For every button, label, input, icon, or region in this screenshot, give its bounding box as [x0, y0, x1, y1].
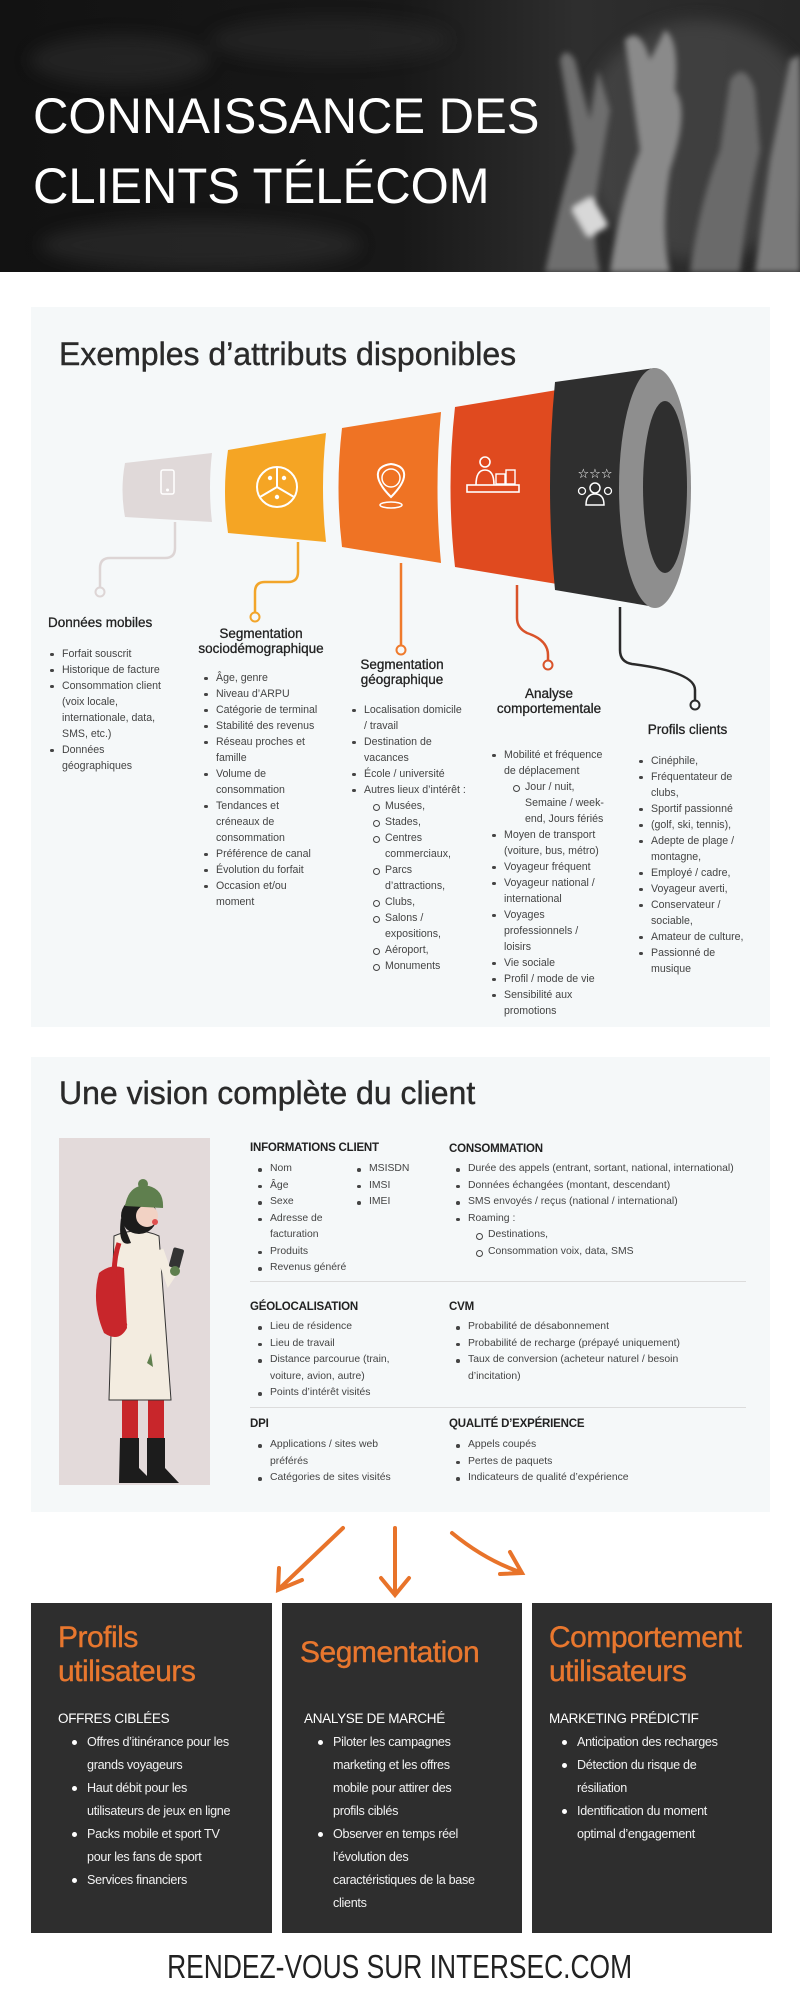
arrow: right — [452, 1533, 522, 1574]
column title: comportementale — [497, 701, 601, 716]
section list: Applications / sites web — [270, 1439, 378, 1450]
box list: Identification du moment — [577, 1804, 707, 1818]
section list: facturation — [270, 1229, 319, 1240]
section list: Sexe — [270, 1196, 294, 1207]
connector: red — [517, 585, 552, 670]
section list: Distance parcourue (train, — [270, 1354, 390, 1365]
section list: Points d’intérêt visités — [270, 1387, 370, 1398]
section list: Appels coupés — [468, 1439, 536, 1450]
background photo: raised hands — [35, 18, 800, 272]
column list: Passionné de — [651, 947, 715, 959]
section list 2: IMSI — [369, 1180, 390, 1190]
column list: Sensibilité aux — [504, 989, 572, 1001]
column list: Adepte de plage / — [651, 835, 734, 847]
funnel segment: yellow — [225, 433, 326, 542]
column list: famille — [216, 752, 247, 764]
heading: exemples d'attributs disponibles: Exemples d’attributs disponibles — [59, 336, 516, 372]
column list: (voix locale, — [62, 696, 118, 708]
column list: Salons / — [385, 912, 423, 924]
column list: professionnels / — [504, 925, 578, 937]
column list: Sportif passionné — [651, 803, 733, 815]
column list: Voyageur averti, — [651, 883, 728, 895]
box list: pour les fans de sport — [87, 1850, 202, 1864]
column list: Centres — [385, 832, 422, 844]
section list: Catégories de sites visités — [270, 1472, 391, 1483]
illustration: woman with phone — [59, 1138, 210, 1485]
box subheading: OFFRES CIBLÉES — [58, 1711, 169, 1726]
box subheading: MARKETING PRÉDICTIF — [549, 1711, 699, 1726]
section: dpi — [250, 1418, 391, 1483]
section list: Pertes de paquets — [468, 1456, 552, 1466]
section list — [456, 1163, 734, 1257]
connector: yellow — [250, 542, 298, 622]
section heading: CVM — [449, 1301, 474, 1313]
column list: Clubs, — [385, 896, 415, 908]
section list: Adresse de — [270, 1212, 323, 1224]
column list: expositions, — [385, 928, 441, 940]
header banner — [0, 0, 800, 272]
column title: Analyse — [525, 686, 573, 701]
column list: Jour / nuit, — [525, 781, 574, 793]
heading: une vision complète du client: Une vision complète du client — [59, 1075, 475, 1111]
section heading: DPI — [250, 1418, 269, 1430]
column: profils clients — [639, 722, 743, 975]
box title: utilisateurs — [58, 1655, 195, 1688]
panel: vision complète — [31, 1057, 770, 1512]
box list: Observer en temps réel — [333, 1827, 458, 1841]
connector: dark — [620, 607, 700, 710]
column list: Tendances et — [216, 800, 279, 812]
section list: Âge — [270, 1180, 288, 1190]
column list: sociable, — [651, 915, 693, 927]
section list: d’incitation) — [468, 1370, 521, 1382]
column title — [497, 686, 601, 716]
section list 2: MSISDN — [369, 1163, 409, 1174]
arrow: left — [278, 1528, 343, 1590]
column list: Destination de — [364, 736, 432, 748]
column list: géographiques — [62, 760, 132, 772]
title: CONNAISSANCE DES — [33, 88, 539, 144]
column list: Historique de facture — [62, 664, 160, 676]
funnel segment: dark cylinder: ☆☆☆ — [578, 467, 612, 482]
section list: voiture, avion, autre) — [270, 1370, 365, 1382]
box title — [549, 1621, 742, 1688]
column list: Localisation domicile — [364, 704, 462, 716]
column list: Monuments — [385, 960, 440, 972]
column list: Employé / cadre, — [651, 867, 730, 879]
column list: Données — [62, 744, 104, 756]
box list — [72, 1735, 230, 1887]
column list: Aéroport, — [385, 944, 429, 956]
section list: Probabilité de recharge (prépayé uniquement) — [468, 1338, 680, 1348]
column list: Voyages — [504, 909, 545, 921]
column title: Profils clients — [648, 722, 727, 737]
column title: sociodémographique — [198, 641, 324, 656]
funnel segment: dark cylinder — [550, 368, 691, 608]
column list: Profil / mode de vie — [504, 973, 595, 985]
box: segmentation — [282, 1603, 522, 1933]
column list: Parcs — [385, 864, 412, 876]
column list — [639, 755, 743, 975]
section list — [258, 1321, 390, 1398]
box: comportement utilisateurs — [532, 1603, 772, 1933]
column list: consommation — [216, 832, 285, 844]
title: CLIENTS TÉLÉCOM — [33, 158, 490, 214]
section list: Probabilité de désabonnement — [468, 1321, 609, 1332]
box list: Détection du risque de — [577, 1758, 696, 1772]
box list: Offres d’itinérance pour les — [87, 1735, 229, 1749]
section heading: QUALITÉ D’EXPÉRIENCE — [449, 1418, 584, 1430]
funnel segment: orange — [338, 412, 441, 563]
box list: caractéristiques de la base — [333, 1873, 475, 1887]
section: géolocalisation — [250, 1299, 390, 1398]
section list: Taux de conversion (acheteur naturel / besoin — [468, 1354, 678, 1365]
section list: Produits — [270, 1246, 308, 1256]
box list: Haut débit pour les — [87, 1781, 187, 1795]
column list: Amateur de culture, — [651, 931, 743, 943]
column list: créneaux de — [216, 816, 274, 828]
column title: Segmentation — [360, 657, 444, 672]
box list — [562, 1735, 718, 1841]
column list — [352, 704, 466, 972]
column list: / travail — [364, 720, 398, 732]
section list: Lieu de travail — [270, 1338, 335, 1348]
column list: Conservateur / — [651, 899, 720, 911]
box list: résiliation — [577, 1781, 627, 1795]
box list: optimal d’engagement — [577, 1827, 695, 1841]
section list: Destinations, — [488, 1229, 548, 1240]
column list: commerciaux, — [385, 848, 451, 860]
column list: musique — [651, 963, 691, 975]
column list: Cinéphile, — [651, 755, 698, 767]
column: segmentation géographique — [352, 657, 466, 972]
box subheading: ANALYSE DE MARCHÉ — [304, 1711, 445, 1726]
section list: Nom — [270, 1163, 292, 1174]
column list: École / université — [364, 768, 445, 780]
column list: internationale, data, — [62, 712, 155, 724]
column list: Semaine / week- — [525, 797, 604, 809]
column: segmentation sociodémographique — [198, 626, 324, 908]
arrow: down — [381, 1528, 409, 1595]
column list: Autres lieux d’intérêt : — [364, 784, 466, 796]
box list: Services financiers — [87, 1873, 187, 1887]
box list: profils ciblés — [333, 1804, 398, 1818]
section list: Consommation voix, data, SMS — [488, 1246, 634, 1256]
section list: Lieu de résidence — [270, 1321, 352, 1332]
column list: consommation — [216, 784, 285, 796]
column list: Volume de — [216, 768, 266, 780]
box list: Piloter les campagnes — [333, 1735, 451, 1749]
column list: montagne, — [651, 851, 701, 863]
footer: RENDEZ-VOUS SUR INTERSEC.COM — [168, 1948, 632, 1985]
column list: Musées, — [385, 800, 425, 812]
section heading: GÉOLOCALISATION — [250, 1301, 358, 1313]
section list 2: IMEI — [369, 1196, 390, 1207]
box list — [318, 1735, 475, 1910]
box list: marketing et les offres — [333, 1758, 450, 1772]
section list 2 — [357, 1163, 409, 1207]
column title: Segmentation — [219, 626, 303, 641]
box list: Anticipation des recharges — [577, 1735, 718, 1749]
column list: Catégorie de terminal — [216, 704, 317, 716]
section list — [456, 1439, 629, 1483]
column list: Consommation client — [62, 680, 161, 692]
section: qualité d'expérience — [449, 1416, 629, 1483]
column list: Moyen de transport — [504, 829, 595, 841]
section list: Indicateurs de qualité d’expérience — [468, 1472, 629, 1483]
box title: Comportement — [549, 1621, 741, 1654]
column: analyse comportementale — [492, 686, 604, 1017]
column list: Niveau d’ARPU — [216, 688, 290, 700]
box list: clients — [333, 1896, 367, 1910]
funnel segment: red orange — [450, 389, 563, 585]
section list: Roaming : — [468, 1212, 515, 1224]
section list: préférés — [270, 1456, 308, 1466]
connector: gray — [96, 522, 175, 596]
section: informations client — [250, 1142, 409, 1273]
section heading: CONSOMMATION — [449, 1143, 543, 1155]
section list: Données échangées (montant, descendant) — [468, 1180, 670, 1190]
column list: Préférence de canal — [216, 848, 311, 860]
box list: mobile pour attirer des — [333, 1781, 451, 1795]
column list: end, Jours fériés — [525, 813, 603, 825]
column title: Données mobiles — [48, 615, 152, 630]
box title — [58, 1621, 195, 1688]
column title — [198, 626, 324, 656]
column list: SMS, etc.) — [62, 728, 111, 740]
column list — [492, 749, 604, 1017]
arrows — [276, 1526, 526, 1598]
column list: loisirs — [504, 941, 531, 953]
funnel chart — [94, 368, 700, 710]
title — [33, 88, 539, 214]
column list: international — [504, 893, 562, 905]
section: cvm — [449, 1301, 680, 1382]
box list: utilisateurs de jeux en ligne — [87, 1804, 230, 1818]
column list: Mobilité et fréquence — [504, 749, 602, 761]
section list — [456, 1321, 680, 1382]
section list — [258, 1439, 391, 1483]
column list: moment — [216, 896, 254, 908]
column title — [360, 657, 444, 688]
box: profils utilisateurs — [31, 1603, 272, 1933]
section list — [258, 1163, 346, 1273]
column list: Réseau proches et — [216, 736, 305, 748]
column list: clubs, — [651, 787, 679, 799]
connector: orange — [396, 563, 406, 654]
column title: géographique — [361, 672, 443, 687]
column list: Évolution du forfait — [216, 864, 304, 876]
box title: Segmentation — [300, 1636, 479, 1669]
box title: utilisateurs — [549, 1655, 686, 1688]
column list — [204, 671, 317, 908]
column list: Voyageur fréquent — [504, 861, 591, 873]
column list: Stabilité des revenus — [216, 720, 314, 732]
column list: d’attractions, — [385, 880, 445, 892]
funnel segment: gray — [122, 453, 212, 522]
column list: Forfait souscrit — [62, 648, 131, 660]
box list: Packs mobile et sport TV — [87, 1827, 220, 1841]
section list: Revenus généré — [270, 1262, 346, 1273]
section: consommation — [449, 1143, 734, 1257]
column list: Voyageur national / — [504, 877, 595, 889]
box list: l’évolution des — [333, 1850, 408, 1864]
column list: Fréquentateur de — [651, 771, 732, 783]
column list: Stades, — [385, 816, 421, 828]
section list: Durée des appels (entrant, sortant, national, international) — [468, 1163, 734, 1174]
panel: exemples d'attributs — [31, 307, 770, 1027]
column list — [50, 648, 161, 772]
column list: Âge, genre — [216, 672, 268, 684]
column list: vacances — [364, 752, 409, 764]
box title: Profils — [58, 1621, 138, 1654]
column list: (voiture, bus, métro) — [504, 845, 599, 857]
column list: (golf, ski, tennis), — [651, 819, 731, 831]
column: données mobiles — [48, 615, 161, 772]
column list: promotions — [504, 1005, 556, 1017]
column list: Vie sociale — [504, 957, 555, 969]
section list: SMS envoyés / reçus (national / international) — [468, 1196, 678, 1207]
section heading: INFORMATIONS CLIENT — [250, 1142, 379, 1154]
box list: grands voyageurs — [87, 1758, 182, 1772]
column list: Occasion et/ou — [216, 880, 287, 892]
column list: de déplacement — [504, 765, 579, 777]
